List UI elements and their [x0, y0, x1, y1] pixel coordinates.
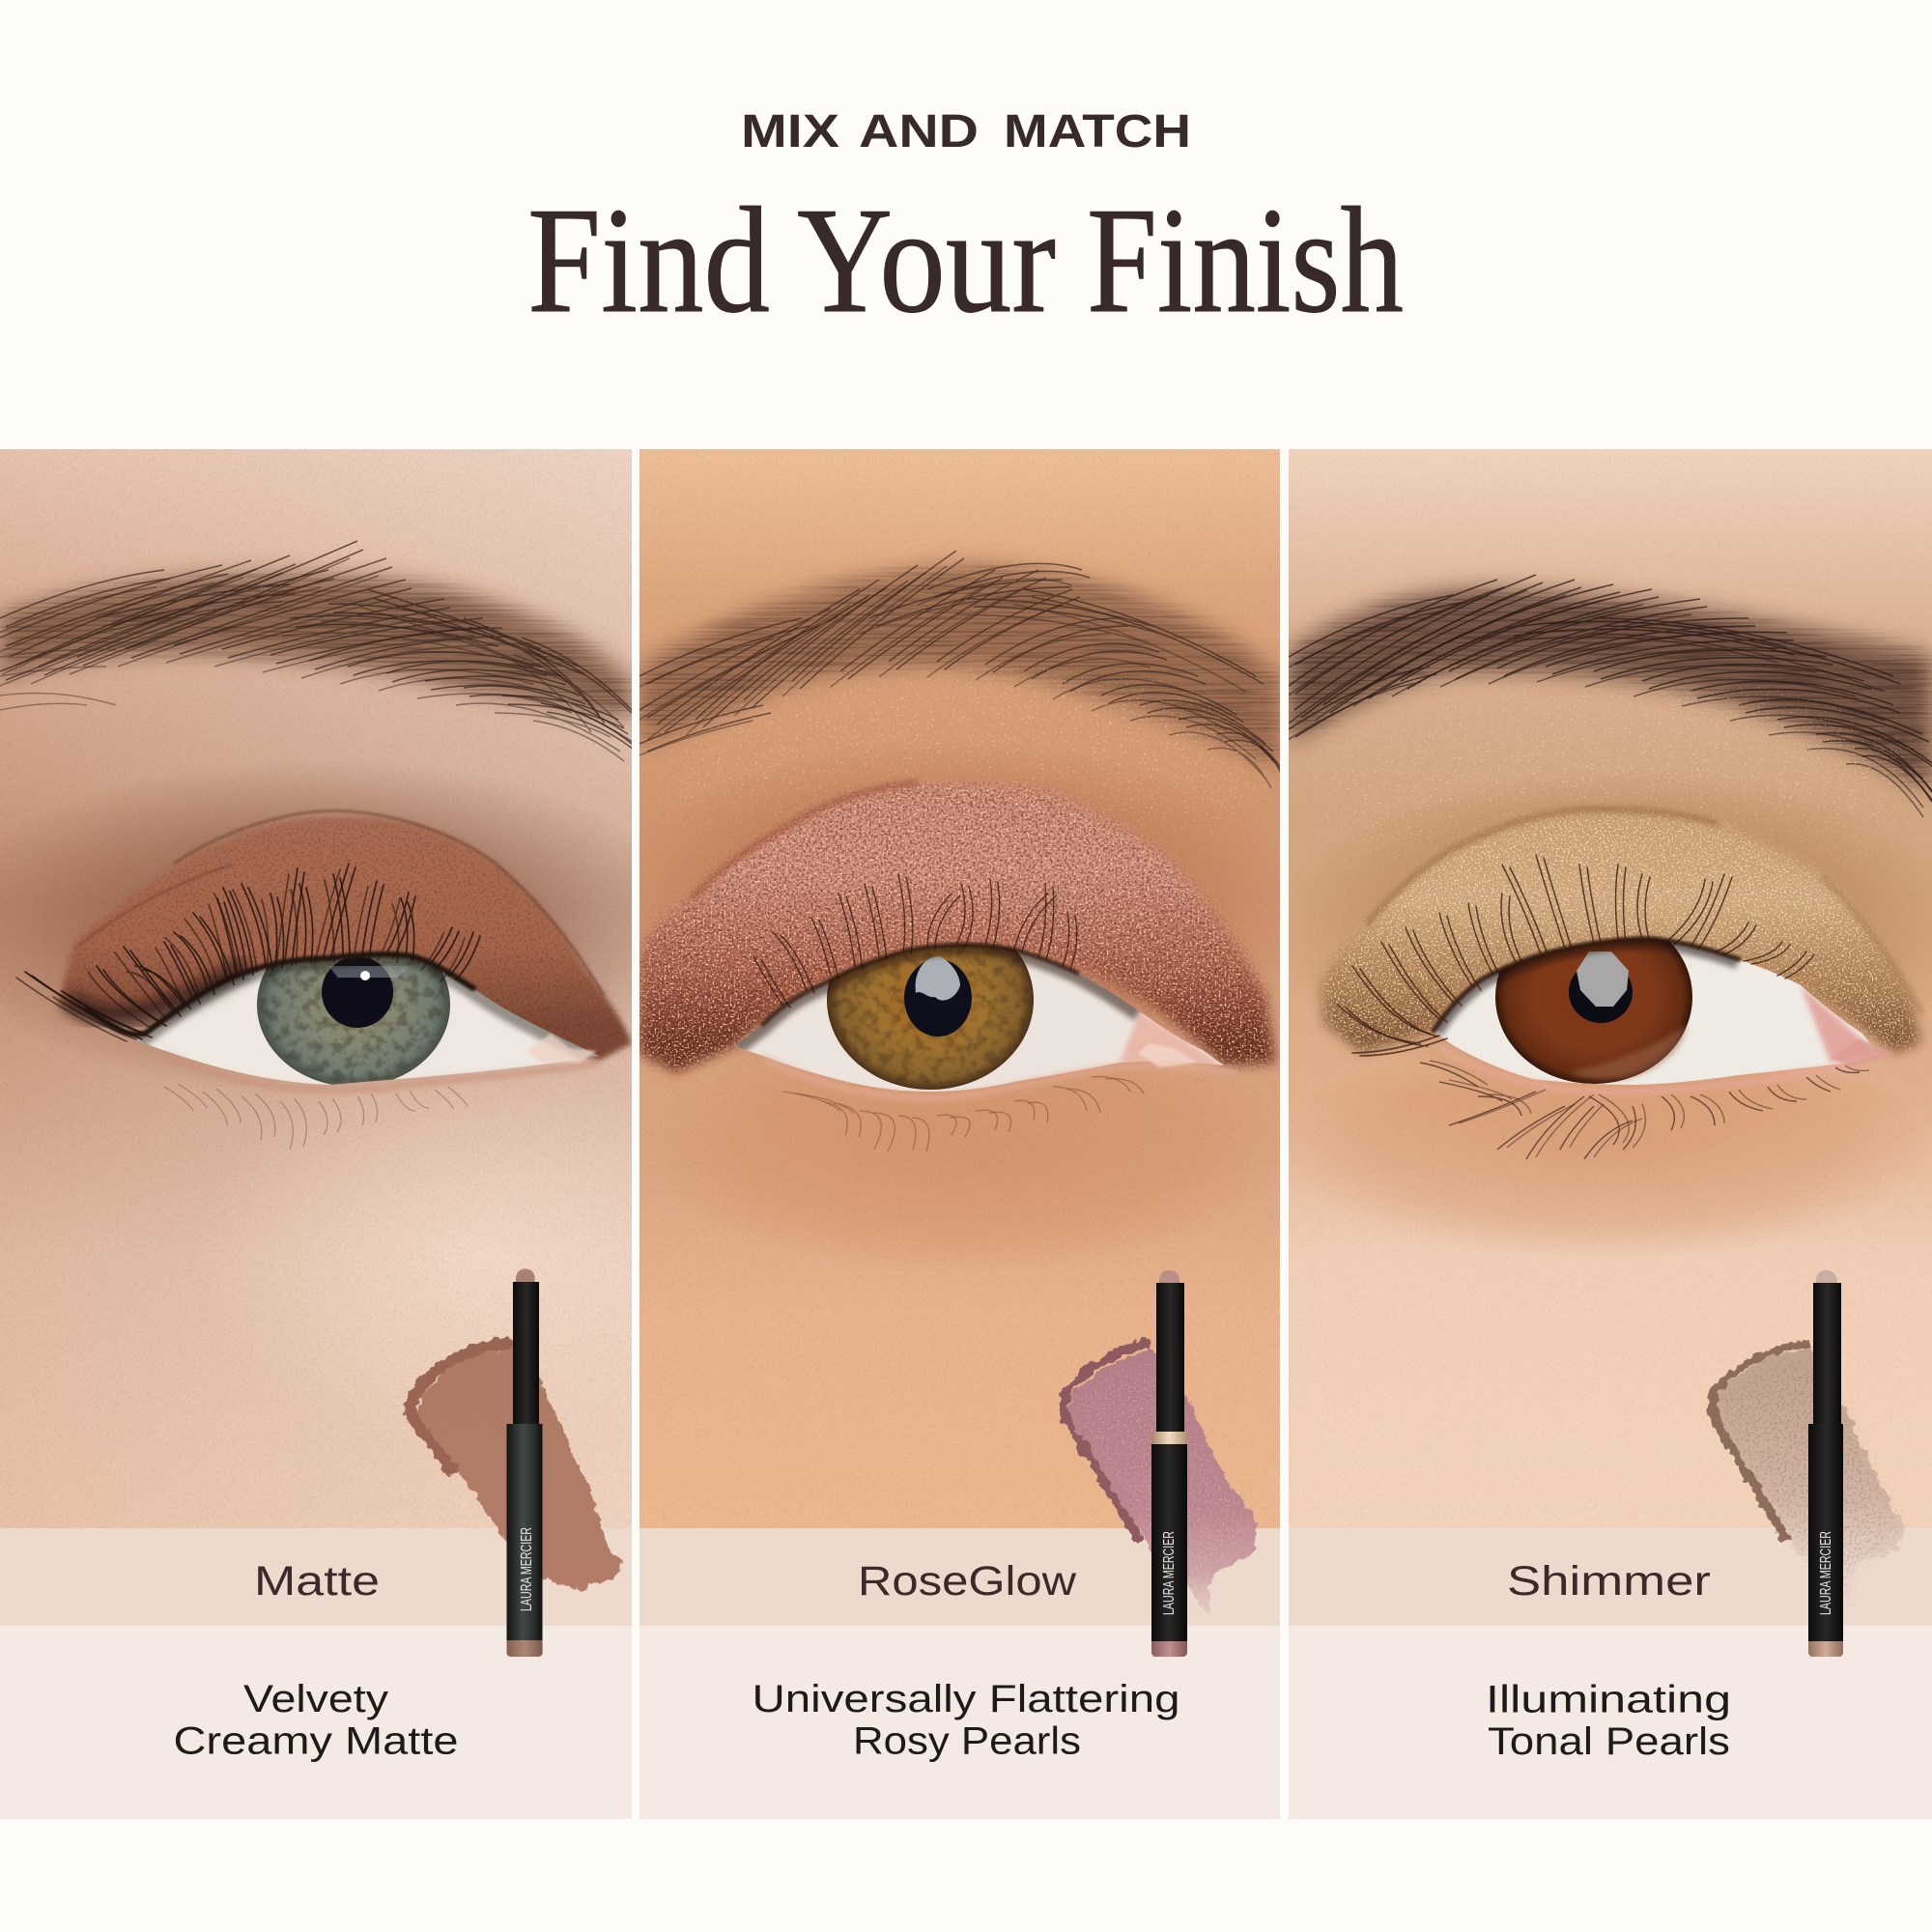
- label: Shimmer: Shimmer: [1507, 1558, 1711, 1605]
- strip: description band: [639, 1626, 1280, 1819]
- product: roseglow pen: [1151, 1270, 1187, 1657]
- product: roseglow pen: LAURA MERCIER: [1161, 1531, 1178, 1615]
- title: Finish: [1087, 176, 1404, 344]
- panel: matte: [0, 449, 632, 1819]
- photo: matte eye: [0, 449, 632, 1528]
- eyeshadow: golden bronze: [1265, 768, 1932, 1096]
- eyebrow heading: AND: [859, 106, 979, 157]
- photo: shimmer eye: [1265, 449, 1932, 1528]
- label: Matte: Matte: [254, 1558, 380, 1605]
- lower lid and lashes: [1420, 1048, 1869, 1159]
- eyebrow heading: MATCH: [1004, 106, 1191, 157]
- tear duct highlight: [527, 1034, 597, 1063]
- title: [527, 176, 1404, 344]
- eyeshadow: matte bronze: [0, 772, 632, 1082]
- strip: label band: [1289, 1528, 1932, 1626]
- upper lashes: [753, 874, 1077, 1008]
- eyebrow: [1280, 575, 1932, 817]
- lower lid and lashes: [164, 1055, 599, 1150]
- description: Illuminating Tonal Pearls: Tonal Pearls: [1488, 1720, 1730, 1763]
- title: Find: [527, 176, 770, 344]
- strip: label band: [639, 1528, 1280, 1626]
- eyeshadow: rose copper: [639, 755, 1280, 1080]
- product: matte pen: [506, 1269, 543, 1657]
- description: Velvety Creamy Matte: Creamy Matte: [174, 1719, 458, 1762]
- description: Universally Flattering Rosy Pearls: [752, 1678, 1180, 1762]
- swatch: roseglow: [1064, 1343, 1259, 1619]
- product: matte pen: LAURA MERCIER: [519, 1527, 535, 1611]
- strip: description band: [0, 1626, 632, 1819]
- product: shimmer pen: LAURA MERCIER: [1818, 1531, 1834, 1615]
- description: Universally Flattering Rosy Pearls: Rosy Pearls: [853, 1719, 1081, 1762]
- eye: hazel iris: [724, 910, 1236, 1101]
- eye: brown iris: [1430, 910, 1893, 1092]
- panel: shimmer: [1265, 449, 1932, 1819]
- description: Universally Flattering Rosy Pearls: Universally Flattering: [752, 1678, 1180, 1720]
- brow-bone sparkle: [657, 667, 1275, 858]
- description: Velvety Creamy Matte: [174, 1678, 458, 1762]
- description: Illuminating Tonal Pearls: [1486, 1679, 1731, 1763]
- title: Your: [797, 176, 1056, 344]
- eyebrow: [0, 541, 638, 761]
- eyebrow heading: MIX: [741, 106, 839, 157]
- eye: grey iris: [56, 950, 599, 1085]
- tear duct: [1831, 1038, 1895, 1066]
- tear duct highlight: [1138, 1043, 1198, 1067]
- lower lid and lashes: [763, 1059, 1236, 1151]
- label: RoseGlow: RoseGlow: [858, 1558, 1077, 1605]
- strip: description band: [1289, 1626, 1932, 1819]
- swatch: matte: [412, 1343, 623, 1590]
- upper lashes: [16, 864, 480, 1041]
- description: Velvety Creamy Matte: Velvety: [243, 1678, 388, 1720]
- eyebrow heading: [741, 106, 1191, 157]
- photo: roseglow eye: [639, 449, 1280, 1528]
- panel: roseglow: [639, 449, 1280, 1819]
- strip: label band: [0, 1528, 632, 1626]
- description: Illuminating Tonal Pearls: Illuminating: [1486, 1679, 1731, 1721]
- product: shimmer pen: [1808, 1270, 1843, 1657]
- swatch: shimmer: [1713, 1345, 1905, 1621]
- upper lashes: [1338, 855, 1814, 1056]
- eyebrow: [630, 551, 1289, 788]
- brow-bone sparkle: [1304, 686, 1922, 898]
